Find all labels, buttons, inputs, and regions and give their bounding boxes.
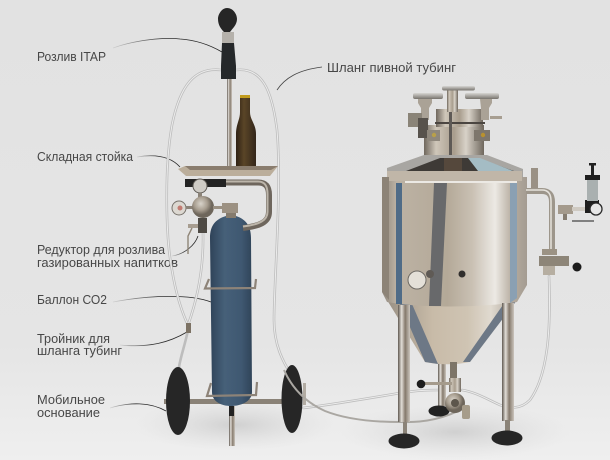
lower clamp	[542, 249, 557, 255]
label: Тройник для шланга тубинг: Тройник для	[37, 332, 110, 346]
folding rack	[178, 79, 278, 228]
black bracket	[185, 179, 226, 187]
left wheel	[166, 367, 190, 435]
dispensing handle	[218, 8, 237, 79]
back leg	[438, 360, 446, 406]
label: Редуктор для розлива газированных напитков: газированных напитков	[37, 256, 178, 270]
thermometer	[408, 271, 426, 289]
cone	[387, 300, 517, 364]
label: Тройник для шланга тубинг: шланга тубинг	[37, 344, 122, 358]
gauge top	[193, 179, 207, 193]
body	[382, 177, 527, 306]
neck	[424, 125, 484, 159]
tray	[178, 166, 278, 176]
right wheel	[282, 365, 302, 433]
rear stay	[303, 383, 306, 405]
lid	[436, 109, 483, 127]
bottom clamp	[207, 382, 257, 396]
label: Складная стойка: Складная стойка	[37, 150, 133, 164]
side pipe and pressure valve	[526, 163, 602, 275]
dome	[387, 155, 523, 180]
feet	[388, 434, 420, 448]
rod	[227, 79, 232, 167]
stripes	[429, 183, 447, 306]
sensor port	[458, 270, 466, 278]
label: Шланг пивной тубинг: Шланг пивной тубинг	[327, 61, 456, 75]
label: Мобильное основание: Мобильное	[37, 393, 105, 407]
regulator body	[192, 196, 214, 218]
cylinder valve	[222, 203, 238, 213]
front left leg	[398, 305, 410, 422]
front right leg	[502, 303, 514, 421]
back foot	[428, 406, 450, 416]
clamps	[408, 113, 422, 127]
label: Розлив ITAP: Розлив ITAP	[37, 50, 106, 64]
label: Баллон СО2: Баллон СО2	[37, 293, 107, 307]
gauge left	[172, 201, 186, 215]
CO2 cylinder	[205, 216, 257, 406]
bent pipe	[526, 191, 552, 252]
bottom valve	[417, 362, 470, 419]
label: Редуктор для розлива газированных напитков: Редуктор для розлива	[37, 243, 165, 257]
tee fitting	[186, 323, 191, 333]
port center	[442, 86, 475, 112]
curved pipe	[226, 182, 269, 228]
label: Мобильное основание: основание	[37, 406, 100, 420]
bottle	[236, 97, 256, 168]
beer tubing	[167, 70, 550, 408]
mobile base	[164, 365, 306, 446]
top clamp	[205, 279, 256, 288]
front foot	[229, 406, 235, 446]
port left	[413, 93, 443, 120]
spunding valve	[558, 205, 573, 214]
tube over right wheel	[284, 370, 462, 422]
port right	[465, 93, 499, 120]
regulator	[172, 179, 238, 254]
callout lines	[110, 38, 322, 411]
fermenter	[382, 86, 527, 448]
axle	[164, 399, 300, 404]
